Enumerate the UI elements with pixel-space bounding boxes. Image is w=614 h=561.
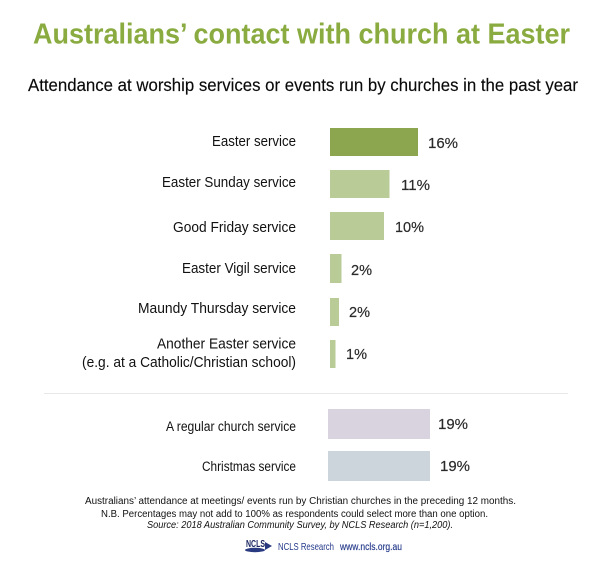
- subtitle: Attendance at worship services or events run by churches in the past year: [28, 75, 578, 95]
- row: Christmas service: Christmas service: [202, 459, 296, 474]
- icon: NCLS logo: NCLS: [246, 539, 265, 550]
- row: Another Easter service: [82, 336, 367, 371]
- row: Easter Sunday service: [162, 170, 430, 198]
- row: Maundy Thursday service: [138, 298, 370, 326]
- row: Easter Sunday service: Easter Sunday service: [162, 175, 296, 191]
- row: Another Easter service: (e.g. at a Catholic/Christian school): [82, 355, 296, 371]
- row: Another Easter service: 1%: [346, 346, 367, 363]
- row: Another Easter service: Another Easter service: [157, 336, 296, 352]
- row: Christmas service: [202, 451, 470, 481]
- row: Christmas service: 19%: [440, 458, 470, 475]
- bar chart: Easter services: [82, 128, 458, 371]
- row: Easter service: [212, 128, 458, 156]
- website: www.ncls.org.au: [339, 541, 402, 553]
- footnote: Source: 2018 Australian Community Survey, by NCLS Research (n=1,200).: [147, 520, 453, 531]
- title: Australians’ contact with church at Easter: [33, 18, 570, 50]
- row: A regular church service: 19%: [438, 416, 468, 433]
- row: Easter Vigil service: [182, 254, 372, 283]
- row: Easter service: Easter service: [212, 134, 296, 150]
- row: Good Friday service: 10%: [395, 219, 424, 236]
- row: Easter Vigil service: 2%: [351, 262, 372, 279]
- row: Easter Sunday service: 11%: [401, 177, 430, 194]
- row: Good Friday service: Good Friday service: [173, 220, 296, 236]
- row: Maundy Thursday service: Maundy Thursday service: [138, 301, 296, 317]
- row: A regular church service: [166, 409, 468, 439]
- footnote: Australians’ attendance at meetings/ events run by Christian churches in the preceding 12 months.: [85, 496, 516, 507]
- row: Maundy Thursday service: 2%: [349, 304, 370, 321]
- footnote: [85, 496, 516, 531]
- NCLS credit: NCLS Research: [278, 541, 334, 553]
- row: A regular church service: A regular church service: [166, 419, 296, 434]
- footnote: N.B. Percentages may not add to 100% as respondents could select more than one option.: [101, 509, 488, 520]
- row: Easter Vigil service: Easter Vigil service: [182, 261, 296, 277]
- row: Easter service: 16%: [428, 135, 458, 152]
- bar chart: comparison services: [166, 409, 470, 481]
- row: Good Friday service: [173, 212, 424, 240]
